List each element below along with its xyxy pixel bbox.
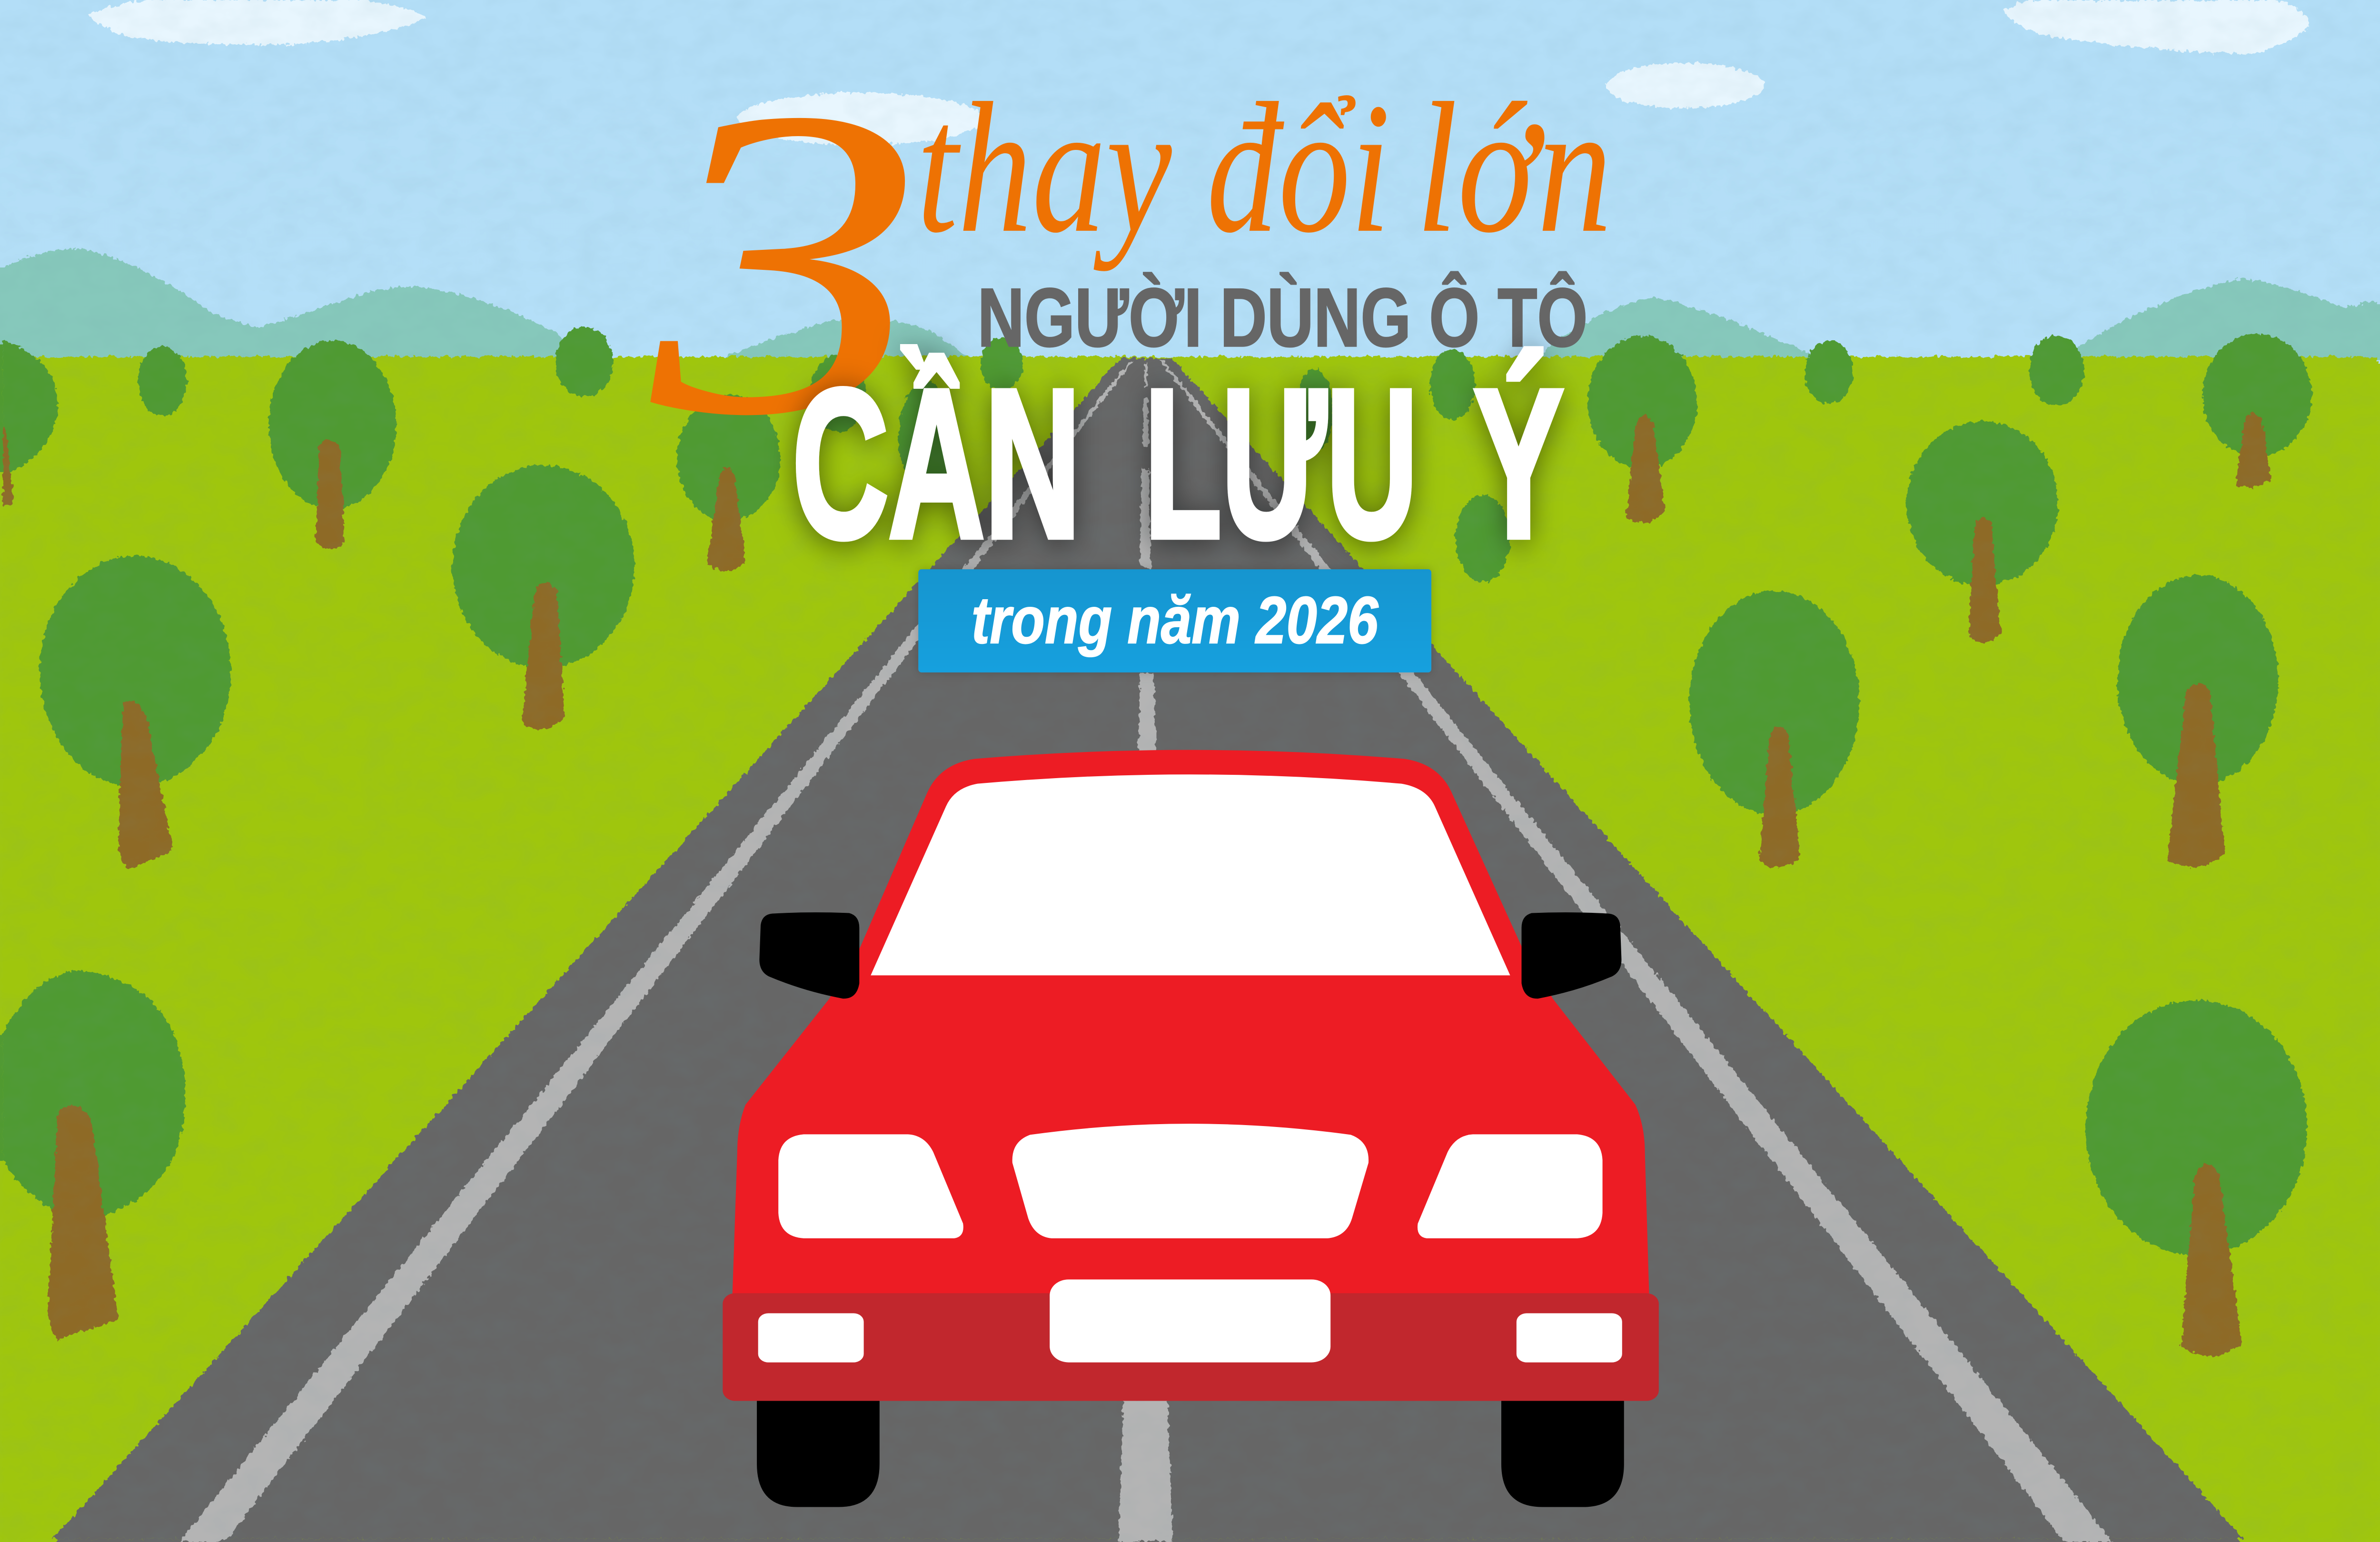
edge fill strips [0, 267, 2380, 1161]
tree 7 [40, 556, 231, 869]
clouds [88, 0, 2309, 145]
main heading: cần lưu ý: LƯU [1144, 346, 1418, 582]
main heading: cần lưu ý: CẦN [793, 345, 1081, 582]
tree 15 [2117, 575, 2278, 868]
script heading: thay đổi lớn: đổi [1207, 64, 1390, 271]
subtitle: người dùng ô tô: NGƯỜI DÙNG Ô TÔ [978, 271, 1587, 364]
title [643, 17, 1612, 672]
grass field edge [3, 356, 2377, 1539]
tree 12 [2202, 334, 2312, 488]
tree 16 [2085, 1000, 2307, 1356]
grass base [0, 364, 2380, 1542]
big script numeral 3: 3 [643, 17, 924, 507]
script heading: thay đổi lớn: lớn [1416, 64, 1612, 271]
license plate [1050, 1279, 1330, 1363]
road [53, 358, 2243, 1539]
script heading: thay đổi lớn: thay [917, 64, 1173, 272]
trees behind title [811, 337, 1510, 582]
car wheels [757, 1395, 1624, 1507]
tree 1 [3, 341, 58, 507]
script heading: thay đổi lớn [917, 64, 1612, 272]
road edge lines [179, 360, 2113, 1542]
windshield [871, 774, 1510, 975]
tree 11 [2029, 336, 2084, 405]
tree 2 [138, 346, 187, 416]
bumper [723, 1293, 1659, 1401]
main heading: cần lưu ý [793, 345, 1563, 582]
hills [3, 248, 2377, 360]
tree 14 [1689, 591, 1859, 868]
right headlight [1418, 1134, 1603, 1238]
tree 3 [268, 341, 396, 549]
tree 13 [1906, 421, 2058, 642]
tree 8 [3, 970, 185, 1339]
right mirror [1522, 912, 1621, 998]
grille [1012, 1124, 1368, 1238]
year badge: trong năm 2026 [972, 583, 1379, 657]
left headlight [778, 1134, 963, 1238]
left mirror [759, 912, 859, 998]
main heading: cần lưu ý: Ý [1474, 346, 1563, 582]
right fog light [1517, 1313, 1622, 1363]
left fog light [758, 1313, 864, 1363]
tree 4 [555, 327, 613, 397]
road center dashes [1119, 364, 1173, 1542]
year badge [918, 569, 1431, 672]
trees right side [1587, 334, 2312, 1356]
red car [723, 750, 1659, 1507]
car body [732, 750, 1649, 1300]
tree 5 [452, 465, 635, 730]
trees left side [3, 327, 780, 1339]
tree 10 [1805, 341, 1853, 404]
tree 9 [1587, 336, 1697, 523]
road base [56, 367, 2241, 1542]
tree 6 [677, 395, 780, 571]
